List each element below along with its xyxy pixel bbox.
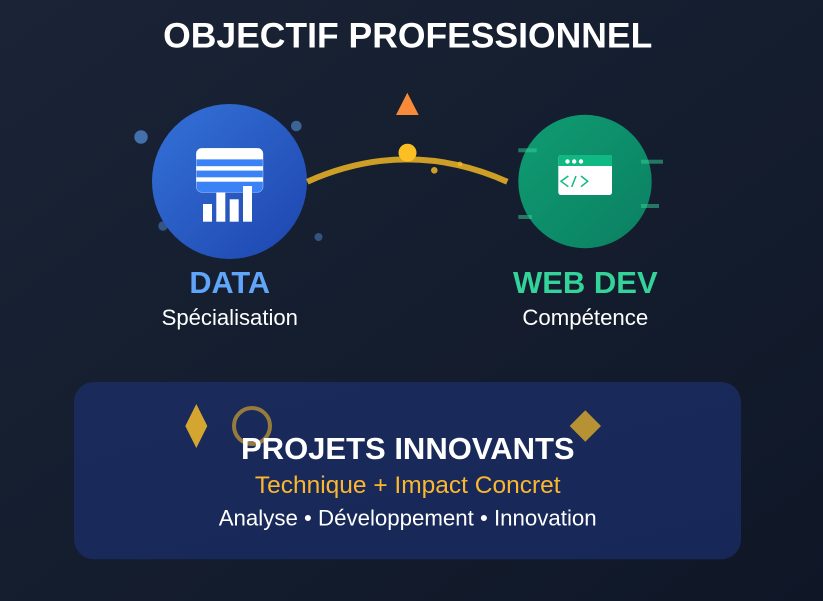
web dev circle with icon [518,115,652,248]
connecting arc [307,159,507,182]
code lines decoration [518,148,663,219]
icon: ring [234,408,270,444]
icon: code window [558,155,612,195]
decorative dots around data circle [134,121,322,241]
data label: DATA [189,265,270,300]
panel subheading: Technique + Impact Concret [255,472,561,499]
icon: data table and bar chart [196,148,263,222]
icon: square diamond [570,410,601,442]
data sublabel: Spécialisation [162,305,298,330]
arc small dots [431,162,462,174]
icon: tall diamond [185,404,207,448]
panel: projets innovants [74,382,741,559]
title: OBJECTIF PROFESSIONNEL [163,16,652,56]
data circle with icon [152,104,307,259]
panel heading: PROJETS INNOVANTS [241,431,575,466]
web dev label: WEB DEV [513,265,658,300]
web dev sublabel: Compétence [522,305,648,330]
panel text: Analyse • Développement • Innovation [219,506,597,530]
icon: orange triangle [396,93,419,115]
arc node [398,144,416,162]
